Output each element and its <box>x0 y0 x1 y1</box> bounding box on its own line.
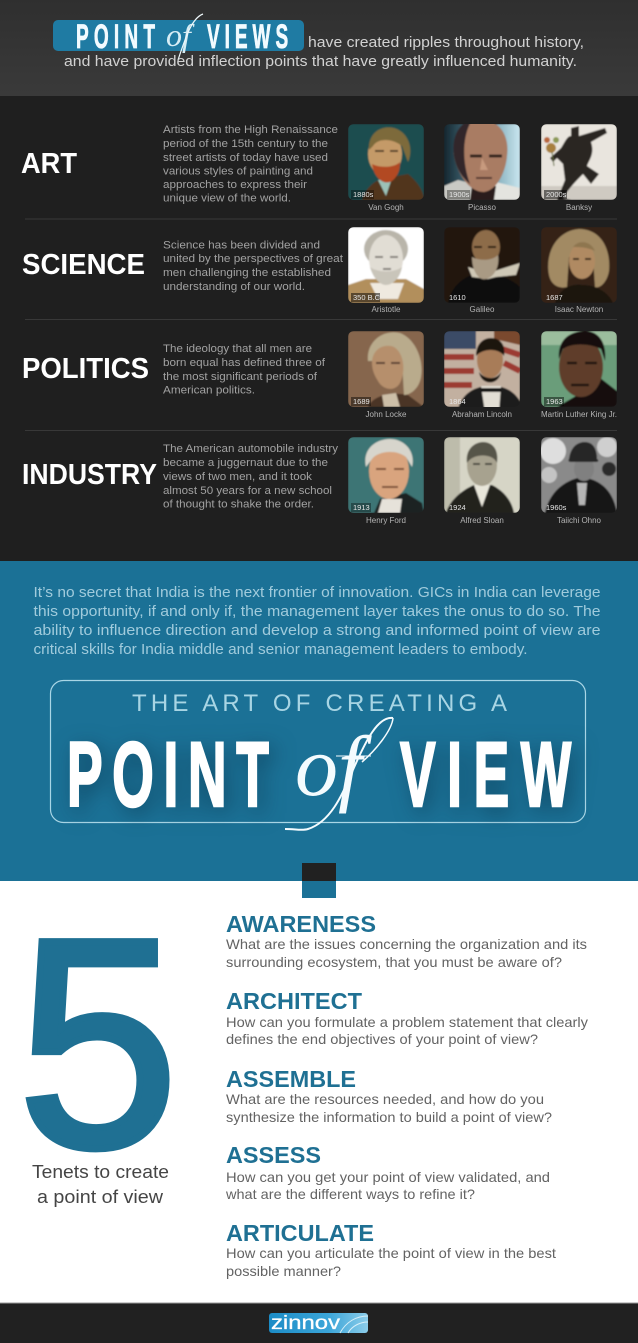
portrait: Isaac Newton <box>541 227 617 314</box>
title: point of view <box>67 718 571 830</box>
row: industry <box>22 437 617 525</box>
heading: science: SCIENCE <box>22 249 145 281</box>
portrait: Galileo <box>444 227 520 314</box>
header badge: Point of Views: of <box>166 17 195 53</box>
portrait: Alfred Sloan <box>444 437 520 525</box>
tenet: architect: How can you formulate a problem statement that clearly <box>226 1014 588 1030</box>
intro paragraph: ability to influence direction and develop a strong and informed point of view are <box>34 623 600 639</box>
tenet: awareness <box>226 911 587 970</box>
heading: art: ART <box>21 148 77 180</box>
text: industry description: The American automobile industry <box>163 443 339 455</box>
text: politics description: born equal has defined three of <box>163 357 326 369</box>
text: politics description: The ideology that all men are <box>163 343 312 355</box>
title: point of view: VIEW <box>400 723 571 826</box>
header band <box>0 0 638 96</box>
name: Abraham Lincoln <box>452 410 512 419</box>
history panel background <box>0 96 638 561</box>
text: art description: Artists from the High Renaissance <box>163 124 338 136</box>
title box <box>50 680 586 830</box>
tenet: awareness: AWARENESS <box>226 911 376 937</box>
name: Banksy <box>566 203 592 212</box>
tenet: architect: defines the end objectives of your point of view? <box>226 1031 538 1047</box>
tenet: articulate: How can you articulate the point of view in the best <box>226 1245 556 1261</box>
title: point of view: POINT <box>67 723 269 826</box>
date label: 1963 <box>546 397 563 406</box>
teal panel <box>0 561 638 881</box>
intro paragraph <box>34 585 600 658</box>
white panel background <box>0 881 638 1303</box>
intro paragraph: critical skills for India middle and senior management leaders to embody. <box>34 642 528 658</box>
text: industry description: almost 50 years for a new school <box>163 485 332 497</box>
tenet: assess <box>225 1142 550 1202</box>
caption: tenets <box>32 1162 169 1207</box>
text: art description: street artists of today have used <box>163 152 328 164</box>
tenet: assess: ASSESS <box>226 1142 321 1168</box>
header badge: Point of Views <box>53 14 304 60</box>
text: industry description <box>163 443 339 510</box>
tenet: assemble: What are the resources needed, and how do you <box>226 1091 544 1107</box>
date label: 1913 <box>353 503 370 512</box>
big number five: 5 <box>18 877 178 1209</box>
text: art description: period of the 15th century to the <box>163 138 328 150</box>
name: Van Gogh <box>368 203 404 212</box>
portrait: Martin Luther King Jr. <box>541 331 617 419</box>
header sentence: and have provided inflection points that have greatly influenced humanity. <box>64 53 577 70</box>
portrait: Taiichi Ohno <box>540 437 617 525</box>
header sentence <box>64 34 584 70</box>
tenet: architect <box>226 988 588 1047</box>
text: art description <box>163 124 338 204</box>
row: art <box>21 120 617 212</box>
text: art description: unique view of the world. <box>163 192 291 204</box>
name: John Locke <box>366 410 407 419</box>
header sentence: have created ripples throughout history, <box>308 34 584 51</box>
portrait: Abraham Lincoln <box>444 331 525 419</box>
date label: 1960s <box>546 503 567 512</box>
text: art description: various styles of painting and <box>163 166 313 178</box>
text: politics description <box>163 343 326 396</box>
name: Picasso <box>468 203 497 212</box>
name: Taiichi Ohno <box>557 516 602 525</box>
row: politics <box>22 331 617 419</box>
portrait: Aristotle <box>348 227 424 314</box>
tenet: assemble: ASSEMBLE <box>226 1066 356 1092</box>
logo: zinnov <box>269 1313 368 1334</box>
footer <box>0 1302 638 1343</box>
intro paragraph: It’s no secret that India is the next frontier of innovation. GICs in India can leverage <box>34 585 600 601</box>
tenet: awareness: surrounding ecosystem, that you must be aware of? <box>226 954 562 970</box>
header badge: Point of Views: POINT <box>76 17 155 55</box>
tenet: assemble <box>226 1066 552 1125</box>
portrait: John Locke <box>348 331 424 419</box>
intro paragraph: this opportunity, if and only if, the management layer takes the onus to do so. The <box>34 604 600 620</box>
header badge: Point of Views: VIEWS <box>207 17 288 55</box>
tenet: awareness: What are the issues concerning the organization and its <box>226 936 587 952</box>
tenet: assess: what are the different ways to refine it? <box>225 1186 475 1202</box>
text: industry description: views of two men, and it took <box>163 471 313 483</box>
text: science description: men challenging the established <box>163 267 331 279</box>
heading: industry: INDUSTRY <box>22 459 157 491</box>
artwork: Banksy <box>541 124 617 212</box>
date label: 1924 <box>449 503 466 512</box>
date label: 1610 <box>449 293 466 302</box>
name: Henry Ford <box>366 516 406 525</box>
text: industry description: became a juggernaut due to the <box>163 457 328 469</box>
logo: zinnov: zinnov <box>271 1313 341 1334</box>
name: Martin Luther King Jr. <box>541 410 617 419</box>
date label: 1900s <box>449 190 470 199</box>
portrait: Henry Ford <box>348 437 424 525</box>
text: politics description: American politics. <box>163 384 255 396</box>
caption: tenets: a point of view <box>37 1187 164 1207</box>
text: art description: approaches to express their <box>163 179 307 191</box>
tenet: articulate: possible manner? <box>226 1263 341 1279</box>
heading: politics: POLITICS <box>22 353 149 385</box>
title: point of view: of <box>295 718 372 814</box>
name: Galileo <box>470 305 495 314</box>
name: Alfred Sloan <box>460 516 504 525</box>
title line: the art of creating a: THE ART OF CREATING A <box>132 690 507 717</box>
name: Isaac Newton <box>555 305 603 314</box>
tenet: assemble: synthesize the information to build a point of view? <box>226 1109 552 1125</box>
text: science description <box>163 240 343 293</box>
date label: 350 B.C <box>353 293 381 302</box>
portrait: Van Gogh <box>348 124 424 212</box>
caption: tenets: Tenets to create <box>32 1162 169 1182</box>
tenet: articulate: ARTICULATE <box>226 1220 374 1246</box>
portrait: Picasso <box>444 120 520 212</box>
date label: 1689 <box>353 397 370 406</box>
name: Aristotle <box>372 305 401 314</box>
tenet: architect: ARCHITECT <box>226 988 363 1014</box>
date label: 1864 <box>449 397 466 406</box>
tenet: articulate <box>226 1220 556 1279</box>
text: science description: understanding of our world. <box>163 281 305 293</box>
text: science description: united by the perspectives of great <box>163 253 343 265</box>
date label: 1687 <box>546 293 563 302</box>
text: industry description: of thought to shake the order. <box>163 498 314 510</box>
text: science description: Science has been divided and <box>163 240 320 252</box>
text: politics description: the most significant periods of <box>163 371 318 383</box>
tenet: assess: How can you get your point of view validated, and <box>226 1169 550 1185</box>
row: science <box>22 227 617 314</box>
connector square <box>302 863 336 898</box>
date label: 1880s <box>353 190 374 199</box>
date label: 2000s <box>546 190 567 199</box>
